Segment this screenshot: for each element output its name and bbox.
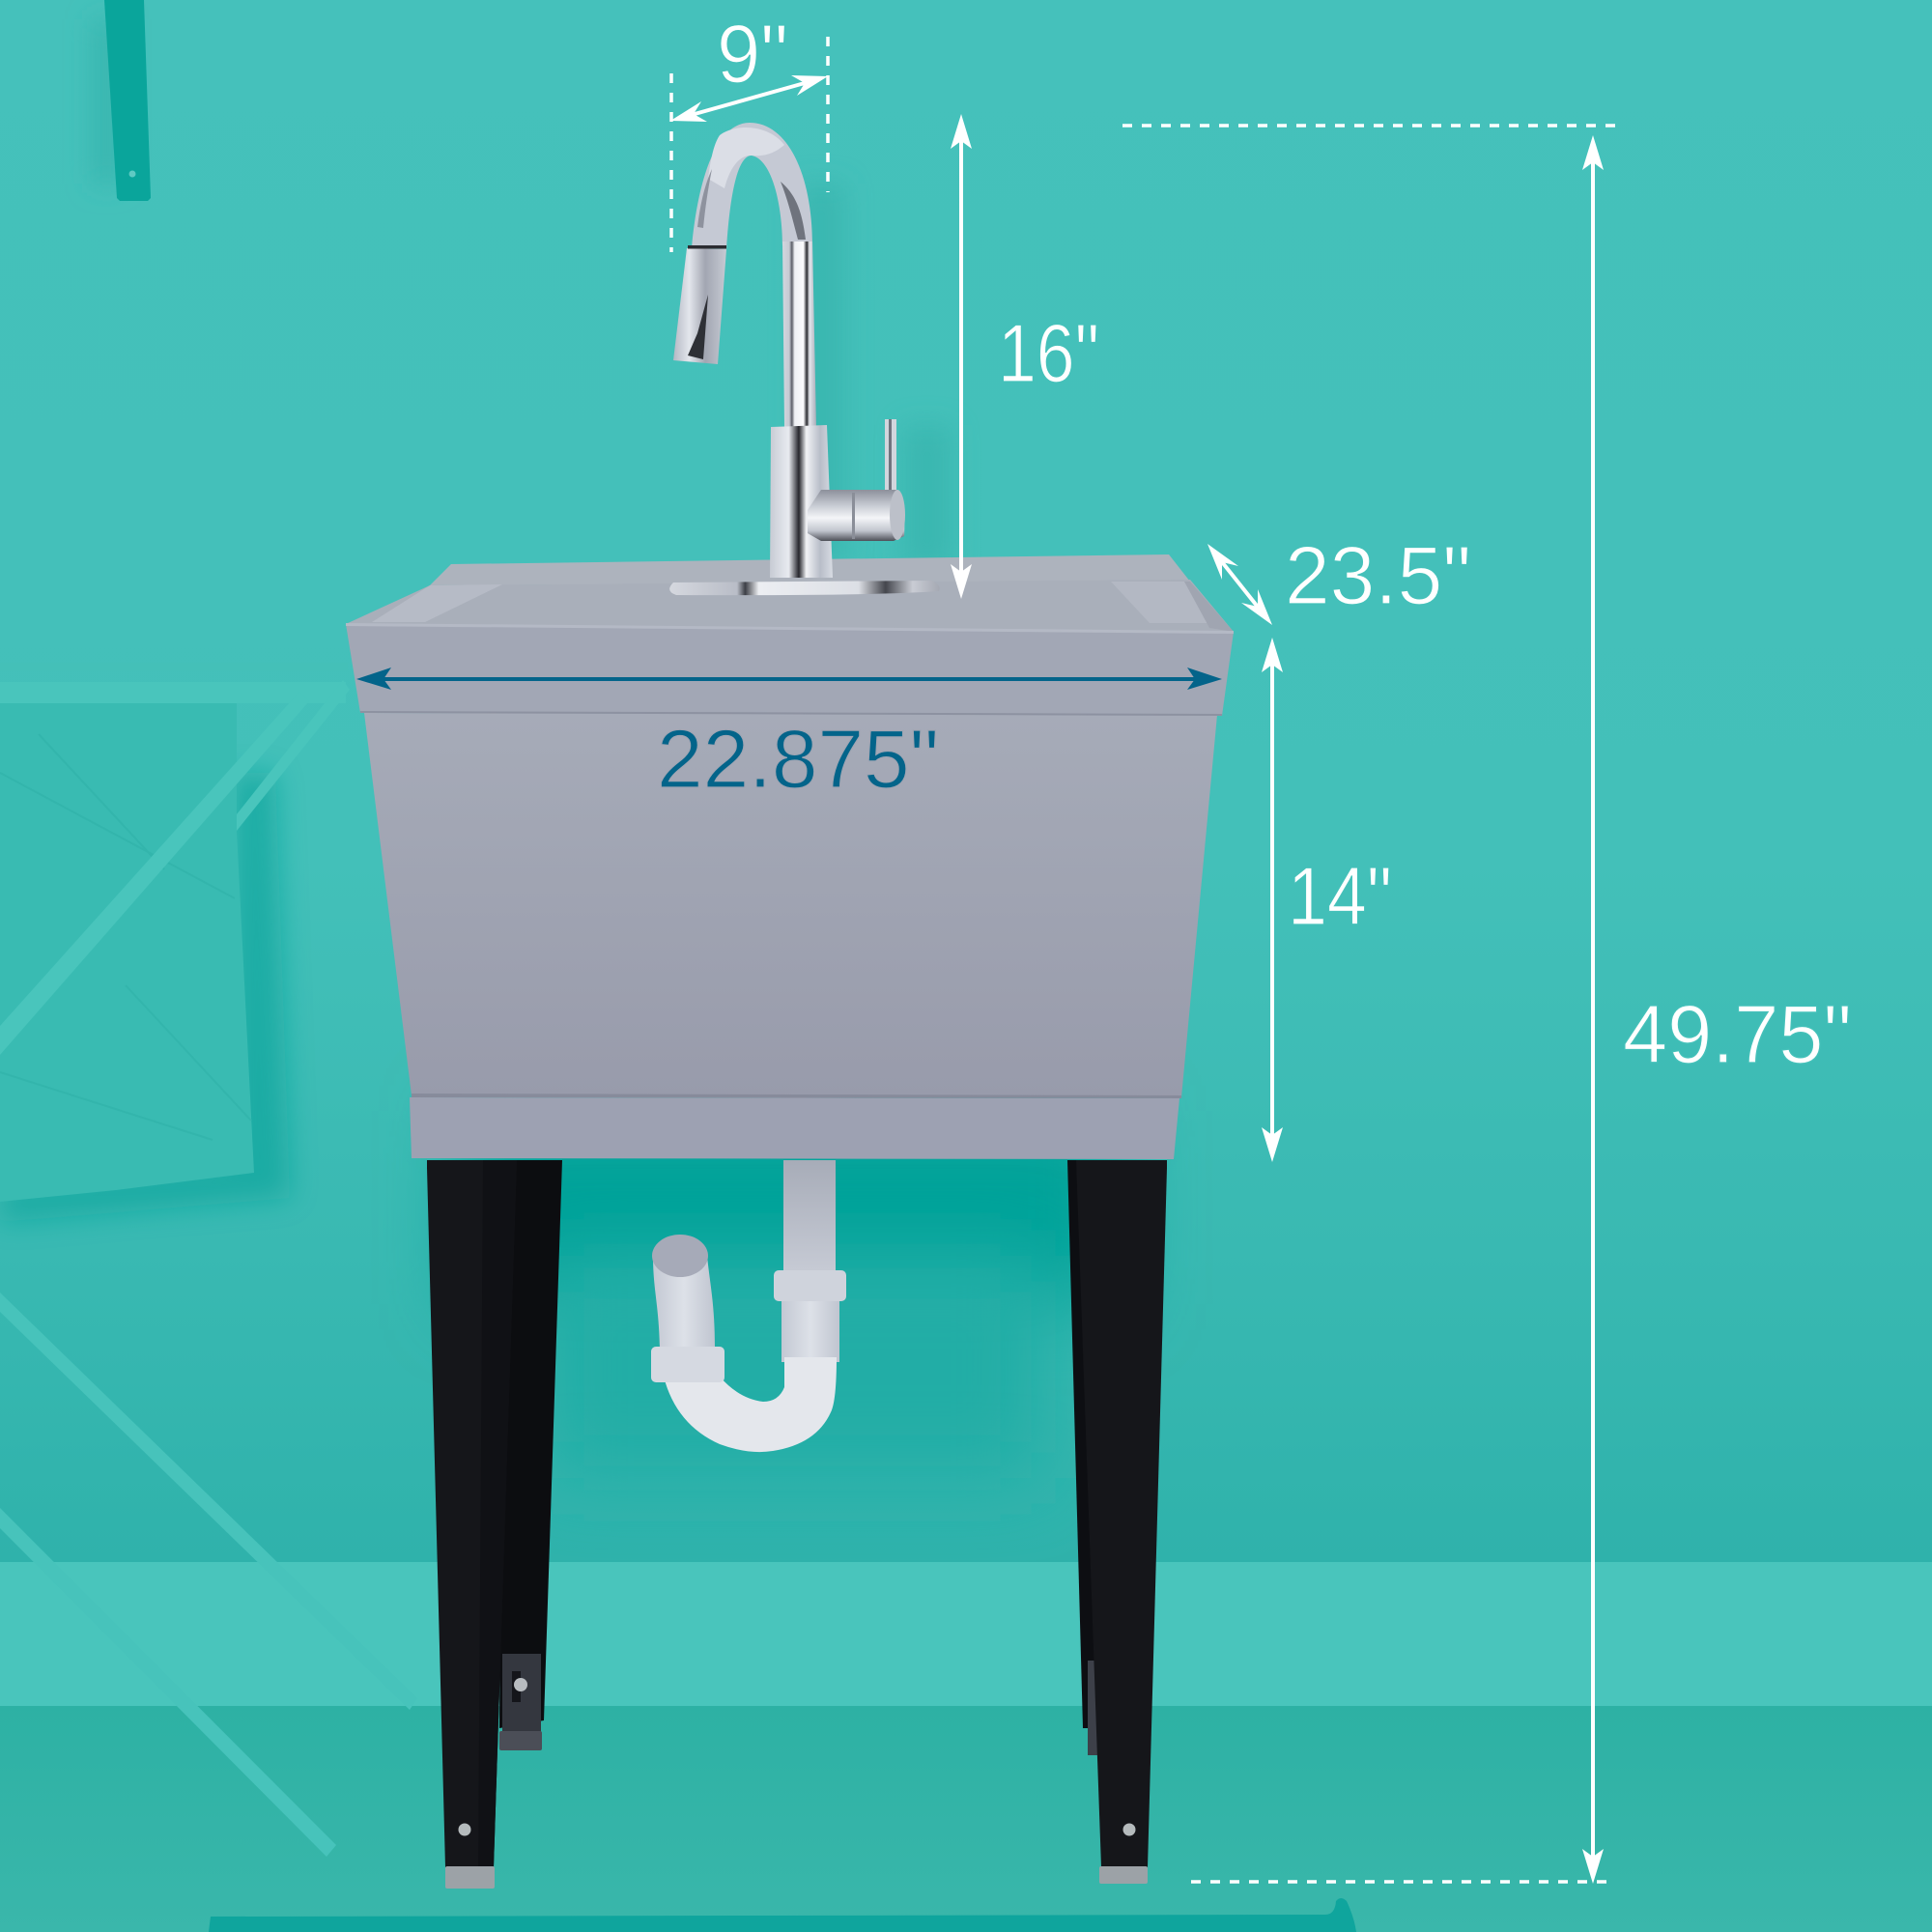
deck, back	[430, 554, 1190, 585]
spray head	[673, 248, 726, 364]
dimension: tub height 14 inches: 14"	[1288, 851, 1392, 943]
drain P-trap	[651, 1160, 846, 1452]
rug	[209, 1898, 1356, 1932]
elbow opening	[652, 1235, 708, 1277]
gooseneck arch	[692, 123, 812, 249]
dimension: faucet height 16 inches: 16"	[998, 308, 1099, 400]
handle cylinder	[808, 490, 904, 541]
right leg back panel	[1067, 1160, 1098, 1728]
lower pipe section	[781, 1299, 839, 1362]
dimension: faucet reach 9 inches: 9"	[717, 9, 788, 100]
dimension: tub height 14 inches	[1262, 638, 1392, 1162]
J bend	[664, 1357, 837, 1452]
dimension: total height 49.75 inches: 49.75"	[1623, 989, 1852, 1081]
dimension: width 22.875 inches: 22.875"	[657, 714, 939, 806]
right foot	[1099, 1866, 1148, 1884]
dimension: faucet reach 9 inches	[670, 9, 828, 252]
slip nut upper	[774, 1270, 846, 1301]
right leg front panel	[1076, 1160, 1167, 1867]
wall bracket, top left	[104, 0, 151, 201]
slip nut lower	[651, 1347, 724, 1382]
dimension: total height 49.75 inches	[1122, 126, 1852, 1884]
faucet riser tube	[782, 242, 816, 427]
left leg back panel	[499, 1160, 562, 1728]
dimension: faucet height 16 inches	[951, 114, 1099, 599]
drying rack and towel, left	[0, 663, 417, 1857]
tailpiece	[783, 1160, 836, 1274]
elbow	[653, 1256, 715, 1348]
basin interior	[346, 580, 1234, 632]
left adjuster bracket	[499, 1654, 542, 1750]
bottom flange	[410, 1097, 1179, 1159]
baseboard	[0, 1562, 1932, 1707]
rack rails	[0, 663, 348, 670]
sink shadow on wall	[0, 19, 1121, 1478]
dimension: depth 23.5 inches: 23.5"	[1285, 530, 1471, 622]
lever	[885, 419, 896, 490]
right adjuster bracket	[1088, 1661, 1098, 1755]
floor	[0, 1706, 1932, 1932]
left foot	[445, 1866, 495, 1889]
left bolt	[458, 1824, 471, 1835]
dimension: depth 23.5 inches	[1208, 530, 1471, 625]
sink tub	[346, 554, 1234, 1159]
left leg front panel	[427, 1160, 517, 1867]
deck plate	[669, 581, 940, 595]
dimension: width 22.875 inches	[356, 668, 1222, 806]
sink legs	[427, 1160, 1167, 1889]
body	[364, 713, 1217, 1097]
faucet base	[770, 425, 833, 578]
rack struts	[0, 692, 309, 1055]
towel	[0, 702, 254, 1202]
right bolt	[1122, 1824, 1136, 1835]
front rim	[346, 624, 1234, 716]
faucet	[669, 123, 940, 595]
